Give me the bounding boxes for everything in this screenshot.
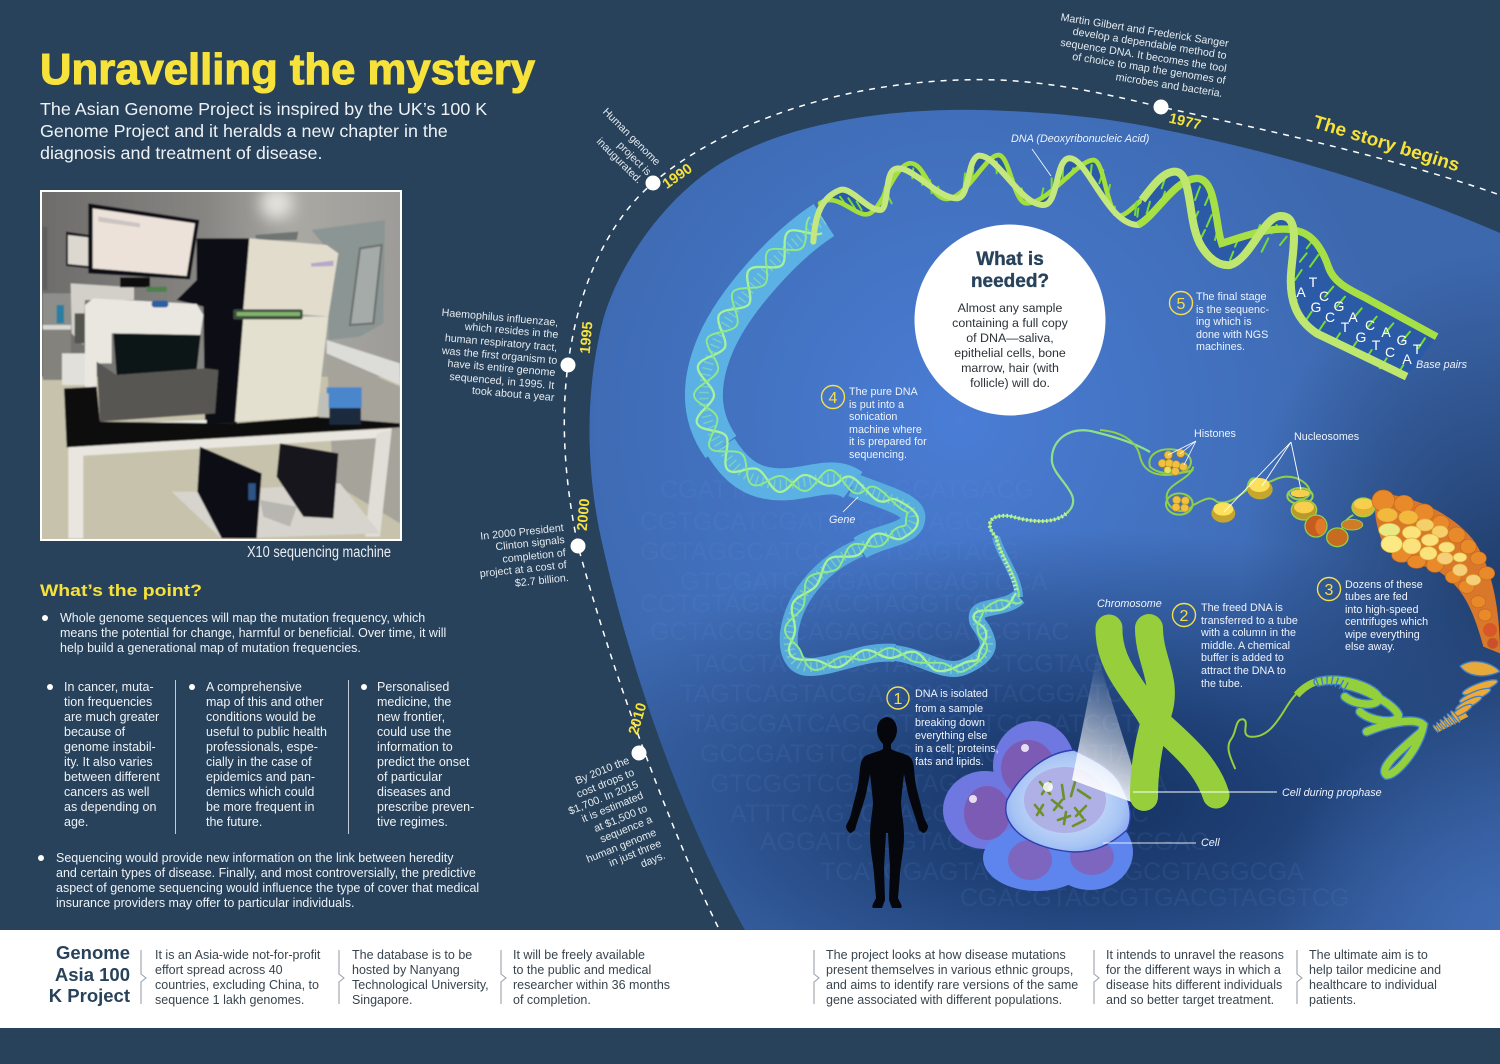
faint DNA letter rows: ATTTCAGTCGACGTACCATCGATTC	[730, 800, 1149, 828]
base pair letters: C	[1385, 344, 1395, 360]
faint DNA letter rows: CGACGTAGCGTGACGTAGGTCG	[960, 884, 1349, 912]
base pair letters: C	[1319, 288, 1329, 304]
chromosomes in nucleus	[1035, 782, 1090, 826]
step 1: in a cell; proteins,	[915, 743, 999, 755]
rear machine	[71, 283, 134, 345]
band text four	[826, 948, 1078, 1007]
step 1: 1	[894, 691, 903, 708]
band text two: The database is to be	[352, 948, 472, 962]
band text six: healthcare to individual	[1309, 978, 1437, 992]
bottom band	[0, 930, 1500, 1028]
band heading	[49, 942, 130, 1006]
rungs	[1135, 178, 1425, 373]
label: cell during prophase: Cell during prophase	[1282, 787, 1382, 799]
bullet: cancer: cancers as well	[64, 785, 149, 799]
DNA double helix: right section and base pairs	[1135, 172, 1437, 377]
timeline marker: 1990: 1990	[660, 161, 696, 193]
callout: what is needed: containing a full copy	[952, 316, 1069, 330]
step 5: machines.	[1196, 341, 1245, 353]
band text two	[352, 948, 489, 1007]
timeline marker: 2000	[570, 498, 593, 554]
timeline text: 2010: in just three	[607, 838, 663, 869]
condensed fibre	[1372, 490, 1500, 653]
bullet: cancer: In cancer, muta-	[64, 680, 154, 694]
bullet: personalised medicine: of particular	[377, 770, 442, 784]
timeline marker: 2010	[626, 701, 650, 760]
label: base pairs: Base pairs	[1416, 359, 1468, 371]
step 5: 5	[1177, 296, 1186, 313]
band text one: effort spread across 40	[155, 963, 283, 977]
timeline text: 1990: Human genome	[600, 106, 662, 168]
step 2: The freed DNA is	[1201, 602, 1283, 614]
band heading: Genome	[56, 942, 130, 963]
label: cell	[1103, 837, 1220, 849]
small monitor	[66, 232, 89, 268]
photo caption: X10 sequencing machine	[247, 544, 391, 561]
timeline text: 1977: sequence DNA. It becomes the tool	[1059, 37, 1227, 75]
step 3: into high-speed	[1345, 604, 1419, 616]
step 3: Dozens of these	[1345, 579, 1423, 591]
histone cluster B	[1172, 496, 1189, 512]
timeline text: 2010: cost drops to	[575, 767, 636, 801]
large monitor	[88, 203, 199, 279]
label: cell: Cell	[1201, 837, 1220, 849]
photo: X10 sequencing machine	[40, 187, 405, 543]
timeline text: 2000: $2.7 billion.	[514, 572, 569, 590]
faint DNA letter rows: AGGATCTCGTAGCATGGTCGATCGAC	[760, 828, 1208, 856]
helix interior	[1138, 172, 1437, 377]
timeline text: 2010: $1,700. In 2015	[567, 779, 640, 818]
callout: what is needed: marrow, hair (with	[961, 361, 1059, 375]
step 5: is the sequenc-	[1196, 304, 1269, 316]
band heading: K Project	[49, 985, 130, 1006]
cell illustration	[943, 721, 1133, 891]
timeline text: 2010: By 2010 the	[574, 755, 631, 787]
step 1: fats and lipids.	[915, 756, 984, 768]
step 1: DNA is isolated	[915, 688, 988, 700]
bullet: mutation frequency: means the potential for change, harmful or beneficial. Over time, it will	[60, 626, 446, 640]
band heading: Asia 100	[55, 964, 130, 985]
faint DNA letter rows: GCCGATGTCGAGTGGACCTGCATTAC	[700, 740, 1151, 768]
timeline text: 2000: completion of	[502, 547, 566, 566]
band text two: hosted by Nanyang	[352, 963, 460, 977]
band text one: sequence 1 lakh genomes.	[155, 993, 304, 1007]
orange coil	[1432, 661, 1500, 733]
base pair letters: G	[1334, 298, 1344, 314]
back strand	[820, 155, 1142, 216]
step 3: else away.	[1345, 641, 1395, 653]
faint DNA letter rows: TACCTAGCGCCTAGCGACTCGTAGT	[690, 650, 1119, 678]
base pair letters: A	[1402, 351, 1412, 367]
bullet: public health	[189, 680, 327, 829]
intro text: Genome Project and it heralds a new chapter in the	[40, 121, 448, 141]
chromosome	[1109, 628, 1216, 797]
band text three: to the public and medical	[513, 963, 651, 977]
title: Unravelling the mystery	[40, 45, 536, 94]
faint DNA letter rows: GCTACGGTCAGAGAGCGATCGTAC	[650, 618, 1069, 646]
label: chromosome: Chromosome	[1097, 598, 1162, 610]
timeline text: 1995: human respiratory tract,	[444, 332, 558, 354]
step 3: tubes are fed	[1345, 591, 1408, 603]
bullet: public health: map of this and other	[206, 695, 323, 709]
step 2: 2	[1180, 608, 1189, 625]
base pair letters: G	[1311, 299, 1321, 315]
band text six: help tailor medicine and	[1309, 963, 1441, 977]
bullet: cancer: as depending on	[64, 800, 156, 814]
faint DNA letter rows: GCTAGGCATCGATGTCAGTACG	[640, 538, 1019, 566]
band text five: and so better target treatment.	[1106, 993, 1274, 1007]
bullet: cancer	[47, 680, 160, 829]
intro text: diagnosis and treatment of disease.	[40, 143, 322, 163]
step 4: The pure DNA	[849, 386, 919, 398]
band text five: It intends to unravel the reasons	[1106, 948, 1284, 962]
timeline text: 2010	[567, 755, 667, 870]
band text four: and aims to identify rare versions of the same	[826, 978, 1078, 992]
heading: what's the point: What’s the point?	[40, 581, 202, 600]
callout: what is needed: follicle) will do.	[970, 376, 1050, 390]
bullet: personalised medicine: medicine, the	[377, 695, 451, 709]
bullet: personalised medicine: Personalised	[377, 680, 449, 694]
timeline text: 1995: Haemophilus influenzae,	[441, 307, 559, 329]
callout: what is needed: needed?	[971, 271, 1049, 292]
histone cluster A	[1158, 449, 1187, 475]
timeline marker: 2010: 2010	[626, 701, 650, 737]
bullet: mutation frequency: help build a generational map of mutation frequencies.	[60, 641, 361, 655]
bullet: personalised medicine: tive regimes.	[377, 815, 448, 829]
dividing cell	[1006, 750, 1130, 852]
step 2: transferred to a tube	[1201, 615, 1298, 627]
step 5: ing which is	[1196, 316, 1252, 328]
faint DNA letter rows: CCTGTAGCGGACCTAGGTCGA	[640, 590, 1009, 618]
bullet: personalised medicine: predict the onset	[377, 755, 469, 769]
step 2: middle. A chemical	[1201, 640, 1290, 652]
timeline text: 2000: project at a cost of	[479, 559, 567, 580]
step 2: with a column in the	[1200, 627, 1296, 639]
step 4: sequencing.	[849, 449, 907, 461]
step 3	[1318, 578, 1428, 653]
step 1: from a sample	[915, 703, 983, 715]
callout: what is needed: of DNA—saliva,	[966, 331, 1054, 345]
bullet: personalised medicine: information to	[377, 740, 453, 754]
base pair letters: G	[1356, 329, 1366, 345]
timeline text: 1977: microbes and bacteria.	[1115, 71, 1223, 100]
bullet: cancer: age.	[64, 815, 88, 829]
step 4: sonication	[849, 411, 897, 423]
timeline text: 2010: human genome	[585, 827, 658, 866]
bullet: cancer: genome instabil-	[64, 740, 156, 754]
chromatin, nucleosomes and coil	[1100, 430, 1500, 775]
timeline text: 2010: at $1,500 to	[592, 803, 649, 835]
step 3: wipe everything	[1344, 629, 1420, 641]
bullet: cancer: are much greater	[64, 710, 159, 724]
band text five: disease hits different individuals	[1106, 978, 1282, 992]
heading: the story begins: The story begins	[1311, 111, 1462, 175]
band text six: patients.	[1309, 993, 1356, 1007]
timeline text: 1977	[1059, 12, 1230, 100]
callout: what is needed: epithelial cells, bone	[954, 346, 1066, 360]
light beam	[1072, 655, 1145, 807]
callout: what is needed	[914, 224, 1106, 416]
timeline text: 1977: of choice to map the genomes of	[1071, 51, 1226, 87]
step 1: breaking down	[915, 717, 985, 729]
bullet: personalised medicine: diseases and	[377, 785, 451, 799]
front strand	[1142, 172, 1407, 377]
bullet: personalised medicine: prescribe preven-	[377, 800, 474, 814]
bullet: mutation frequency: Whole genome sequences will map the mutation frequency, which	[60, 611, 425, 625]
band text two: Technological University,	[352, 978, 489, 992]
label: nucleosomes: Nucleosomes	[1294, 431, 1359, 443]
front strand	[813, 156, 1138, 242]
step 4: machine where	[849, 424, 922, 436]
tubes	[327, 387, 362, 408]
bullet: mutation frequency	[42, 611, 446, 655]
step 1: everything else	[915, 730, 987, 742]
timeline text: 1995: was the first organism to	[440, 345, 558, 367]
base pair letters: A	[1348, 309, 1358, 325]
timeline marker: 1977	[1154, 100, 1202, 134]
label: histones: Histones	[1194, 428, 1236, 440]
step 4: is put into a	[849, 399, 904, 411]
base pair letters: A	[1381, 324, 1391, 340]
timeline text: 2010: it is estimated	[580, 790, 645, 825]
bullet: public health: demics which could	[206, 785, 314, 799]
table	[64, 387, 400, 447]
timeline text: 1977: develop a dependable method to	[1072, 26, 1227, 62]
step 2	[1172, 602, 1298, 690]
step 2: attract the DNA to	[1201, 665, 1286, 677]
band text five	[1106, 948, 1284, 1007]
timeline marker: 1995	[560, 321, 596, 372]
lower shelf	[172, 483, 380, 539]
band text four: gene associated with different populations.	[826, 993, 1062, 1007]
step 1	[887, 687, 999, 768]
timeline marker: 1977: 1977	[1167, 111, 1202, 134]
bullet: heredity: aspect of genome sequencing would influence the type of cover that medical	[56, 881, 479, 895]
column	[177, 238, 249, 423]
label: histones	[1168, 428, 1236, 465]
timeline text: 2000: In 2000 President	[480, 522, 564, 543]
base pair letters: A	[1296, 284, 1306, 300]
bullet: public health: A comprehensive	[206, 680, 302, 694]
timeline text: 1990: inaugurated.	[594, 136, 644, 186]
timeline text: 1995: took about a year	[471, 385, 555, 404]
bullet: public health: be more frequent in	[206, 800, 314, 814]
bullet: heredity: and certain types of disease. Finally, and most controversially, the predictive	[56, 866, 476, 880]
bullet: heredity	[38, 851, 479, 910]
step 4	[822, 386, 927, 461]
base pair letters	[1296, 274, 1422, 367]
helix interior	[813, 155, 1142, 242]
faint DNA letter rows: TAGTCAGTACGATCGGACTACGGATC	[680, 680, 1124, 708]
timeline text: 1995	[440, 307, 559, 404]
base pair letters: T	[1309, 274, 1318, 290]
base pair letters: G	[1397, 332, 1407, 348]
human silhouette	[846, 717, 928, 908]
bullet: public health: the future.	[206, 815, 262, 829]
intro text: The Asian Genome Project is inspired by the UK’s 100 K	[40, 99, 487, 119]
base pair letters: T	[1372, 337, 1381, 353]
base pair letters: T	[1413, 341, 1422, 357]
bullet: personalised medicine: could use the	[377, 725, 451, 739]
step 5: The final stage	[1196, 291, 1267, 303]
timeline text: 2000: Clinton signals	[495, 534, 565, 553]
nucleosomes	[1211, 478, 1375, 547]
band text one	[155, 948, 320, 1007]
bullet: public health: epidemics and pan-	[206, 770, 315, 784]
band text four: The project looks at how disease mutations	[826, 948, 1066, 962]
band text three: of completion.	[513, 993, 591, 1007]
front machine	[85, 298, 203, 417]
band text one: It is an Asia-wide not-for-profit	[155, 948, 320, 962]
step 3: centrifuges which	[1345, 616, 1428, 628]
bullet: cancer: tion frequencies	[64, 695, 152, 709]
timeline marker: 1995: 1995	[578, 321, 596, 354]
label: nucleosomes	[1224, 431, 1359, 512]
step 2: the tube.	[1201, 678, 1243, 690]
rungs	[840, 162, 1138, 217]
band text six	[1309, 948, 1441, 1007]
timeline text: 1977: Martin Gilbert and Frederick Sanger	[1060, 12, 1230, 50]
timeline text: 2010: days.	[639, 850, 667, 870]
DNA double helix: left section	[813, 155, 1142, 242]
label: DNA	[1011, 133, 1149, 176]
bullet: heredity: Sequencing would provide new information on the link between heredity	[56, 851, 453, 865]
faint DNA letter rows: TCATGGAGTACGTGCATAGCGTAGGCGA	[820, 858, 1304, 886]
bullet: public health: cially in the case of	[206, 755, 312, 769]
intro text	[40, 99, 487, 163]
timeline text: 2010: sequence a	[598, 814, 654, 845]
faint DNA letter rows: CGATTAGCATCGTAGCATGACG	[660, 476, 1034, 504]
step 3: 3	[1325, 582, 1334, 599]
timeline marker: 2000: 2000	[575, 498, 593, 531]
label: DNA: DNA (Deoxyribonucleic Acid)	[1011, 133, 1149, 145]
bullet: personalised medicine: new frontier,	[377, 710, 445, 724]
green coil	[1228, 680, 1423, 775]
bullet: cancer: because of	[64, 725, 125, 739]
gene ribbon	[694, 217, 1150, 672]
bullet: public health: professionals, espe-	[206, 740, 318, 754]
band text three: It will be freely available	[513, 948, 645, 962]
label: gene	[829, 497, 858, 526]
band text four: present themselves in various ethnic groups,	[826, 963, 1073, 977]
band text one: countries, excluding China, to	[155, 978, 319, 992]
band text three: researcher within 36 months	[513, 978, 670, 992]
timeline dashed arc	[564, 80, 1500, 927]
helix rungs	[704, 220, 1019, 669]
label: gene: Gene	[829, 514, 855, 526]
step 2: buffer is added to	[1201, 652, 1284, 664]
timeline text: 1995: have its entire genome	[447, 358, 556, 379]
base pair letters: T	[1341, 319, 1350, 335]
step 4: it is prepared for	[849, 436, 927, 448]
timeline text: 2000	[479, 522, 569, 590]
faint DNA letter rows	[640, 476, 1349, 912]
timeline text: 1995: sequenced, in 1995. It	[449, 371, 555, 392]
callout: what is needed: What is	[976, 249, 1044, 270]
column divider one	[175, 680, 176, 834]
bullet: public health: conditions would be	[206, 710, 316, 724]
chromatin thread	[1100, 430, 1353, 537]
column divider two	[348, 680, 349, 834]
callout: what is needed: Almost any sample	[958, 301, 1062, 315]
helix strand A	[697, 230, 1016, 671]
band text six: The ultimate aim is to	[1309, 948, 1428, 962]
bullet: public health: useful to public health	[206, 725, 327, 739]
base pair letters: C	[1325, 309, 1335, 325]
faint DNA letter rows: GTCGGTCGACGTAGCTGACGATCCGA	[710, 770, 1168, 798]
helix strand B	[694, 217, 1022, 672]
band text five: for the different ways in which a	[1106, 963, 1281, 977]
bullet: cancer: ity. It also varies	[64, 755, 153, 769]
faint DNA letter rows: GTCGATCAGGACCTGAGTCCA	[680, 568, 1048, 596]
band chevron dividers	[141, 950, 1302, 1004]
band text three	[513, 948, 670, 1007]
back strand	[1138, 178, 1437, 337]
main machine	[243, 238, 338, 317]
bullet: personalised medicine	[361, 680, 474, 829]
step 5	[1170, 291, 1269, 353]
bullet: cancer: between different	[64, 770, 160, 784]
bullet: heredity: insurance providers may offer to particular individuals.	[56, 896, 355, 910]
timeline text: 1990: project is	[615, 139, 653, 178]
band text two: Singapore.	[352, 993, 412, 1007]
faint DNA letter rows: TAGCGATCAGCGTACGATCGGATCGTA	[690, 710, 1151, 738]
thin DNA thread	[990, 430, 1150, 597]
step 4: 4	[829, 390, 838, 407]
outer cells	[943, 721, 1133, 891]
timeline text: 1995: which resides in the	[463, 321, 559, 341]
step 5: done with NGS	[1196, 329, 1268, 341]
PCs	[197, 447, 262, 538]
base pair letters: C	[1365, 317, 1375, 333]
faint DNA letter rows: CGTGCATCGATTAGCGTAGC	[640, 508, 983, 536]
blue cell background panel	[560, 90, 1500, 940]
